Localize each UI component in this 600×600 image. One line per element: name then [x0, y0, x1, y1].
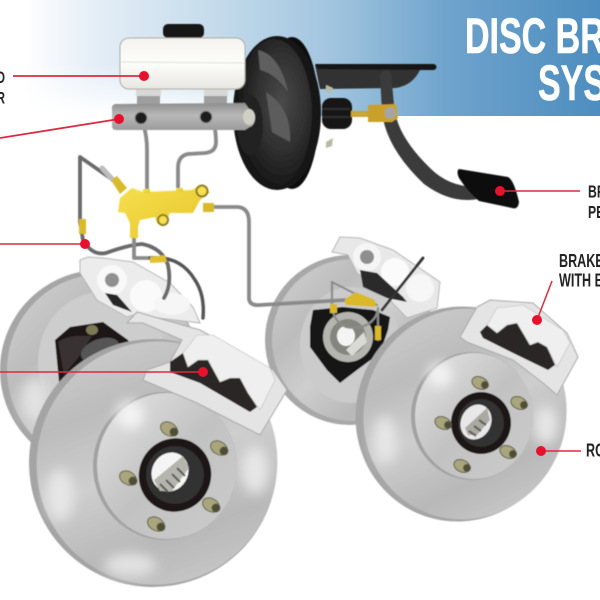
pushrod clevis	[351, 104, 398, 122]
label: fluid reservoir	[0, 69, 149, 108]
rear right caliper	[332, 237, 440, 318]
pedal bracket	[315, 64, 436, 89]
pedal arm and pedal pad	[380, 71, 519, 208]
label: brake caliper with brake pads	[532, 252, 600, 325]
label: rotor	[536, 441, 600, 461]
front left rotor	[0, 298, 318, 600]
callout: master cylinder	[0, 114, 124, 138]
brake booster	[233, 36, 321, 190]
front left caliper with pads	[127, 312, 287, 435]
brake lines	[80, 120, 423, 340]
callout: brake lines	[0, 239, 90, 249]
callout: brake pads	[0, 367, 208, 377]
front right rotor	[325, 277, 596, 551]
header background band	[0, 0, 600, 116]
wheel bearing and splines	[125, 425, 225, 525]
master cylinder	[112, 86, 255, 130]
rear left caliper	[80, 257, 200, 323]
pushrod boot	[322, 85, 352, 148]
title	[465, 9, 600, 112]
rear left rotor	[0, 270, 200, 470]
label: brake pedal	[495, 182, 600, 223]
proportioning valve	[79, 176, 214, 263]
fluid reservoir	[120, 24, 245, 89]
wheel bearing and splines	[451, 392, 511, 454]
front right caliper with pads	[460, 300, 578, 395]
wheel studs	[117, 419, 230, 534]
rear right proportioning fittings	[330, 292, 381, 340]
rear right rotor	[265, 255, 435, 425]
wheel studs	[433, 374, 529, 475]
